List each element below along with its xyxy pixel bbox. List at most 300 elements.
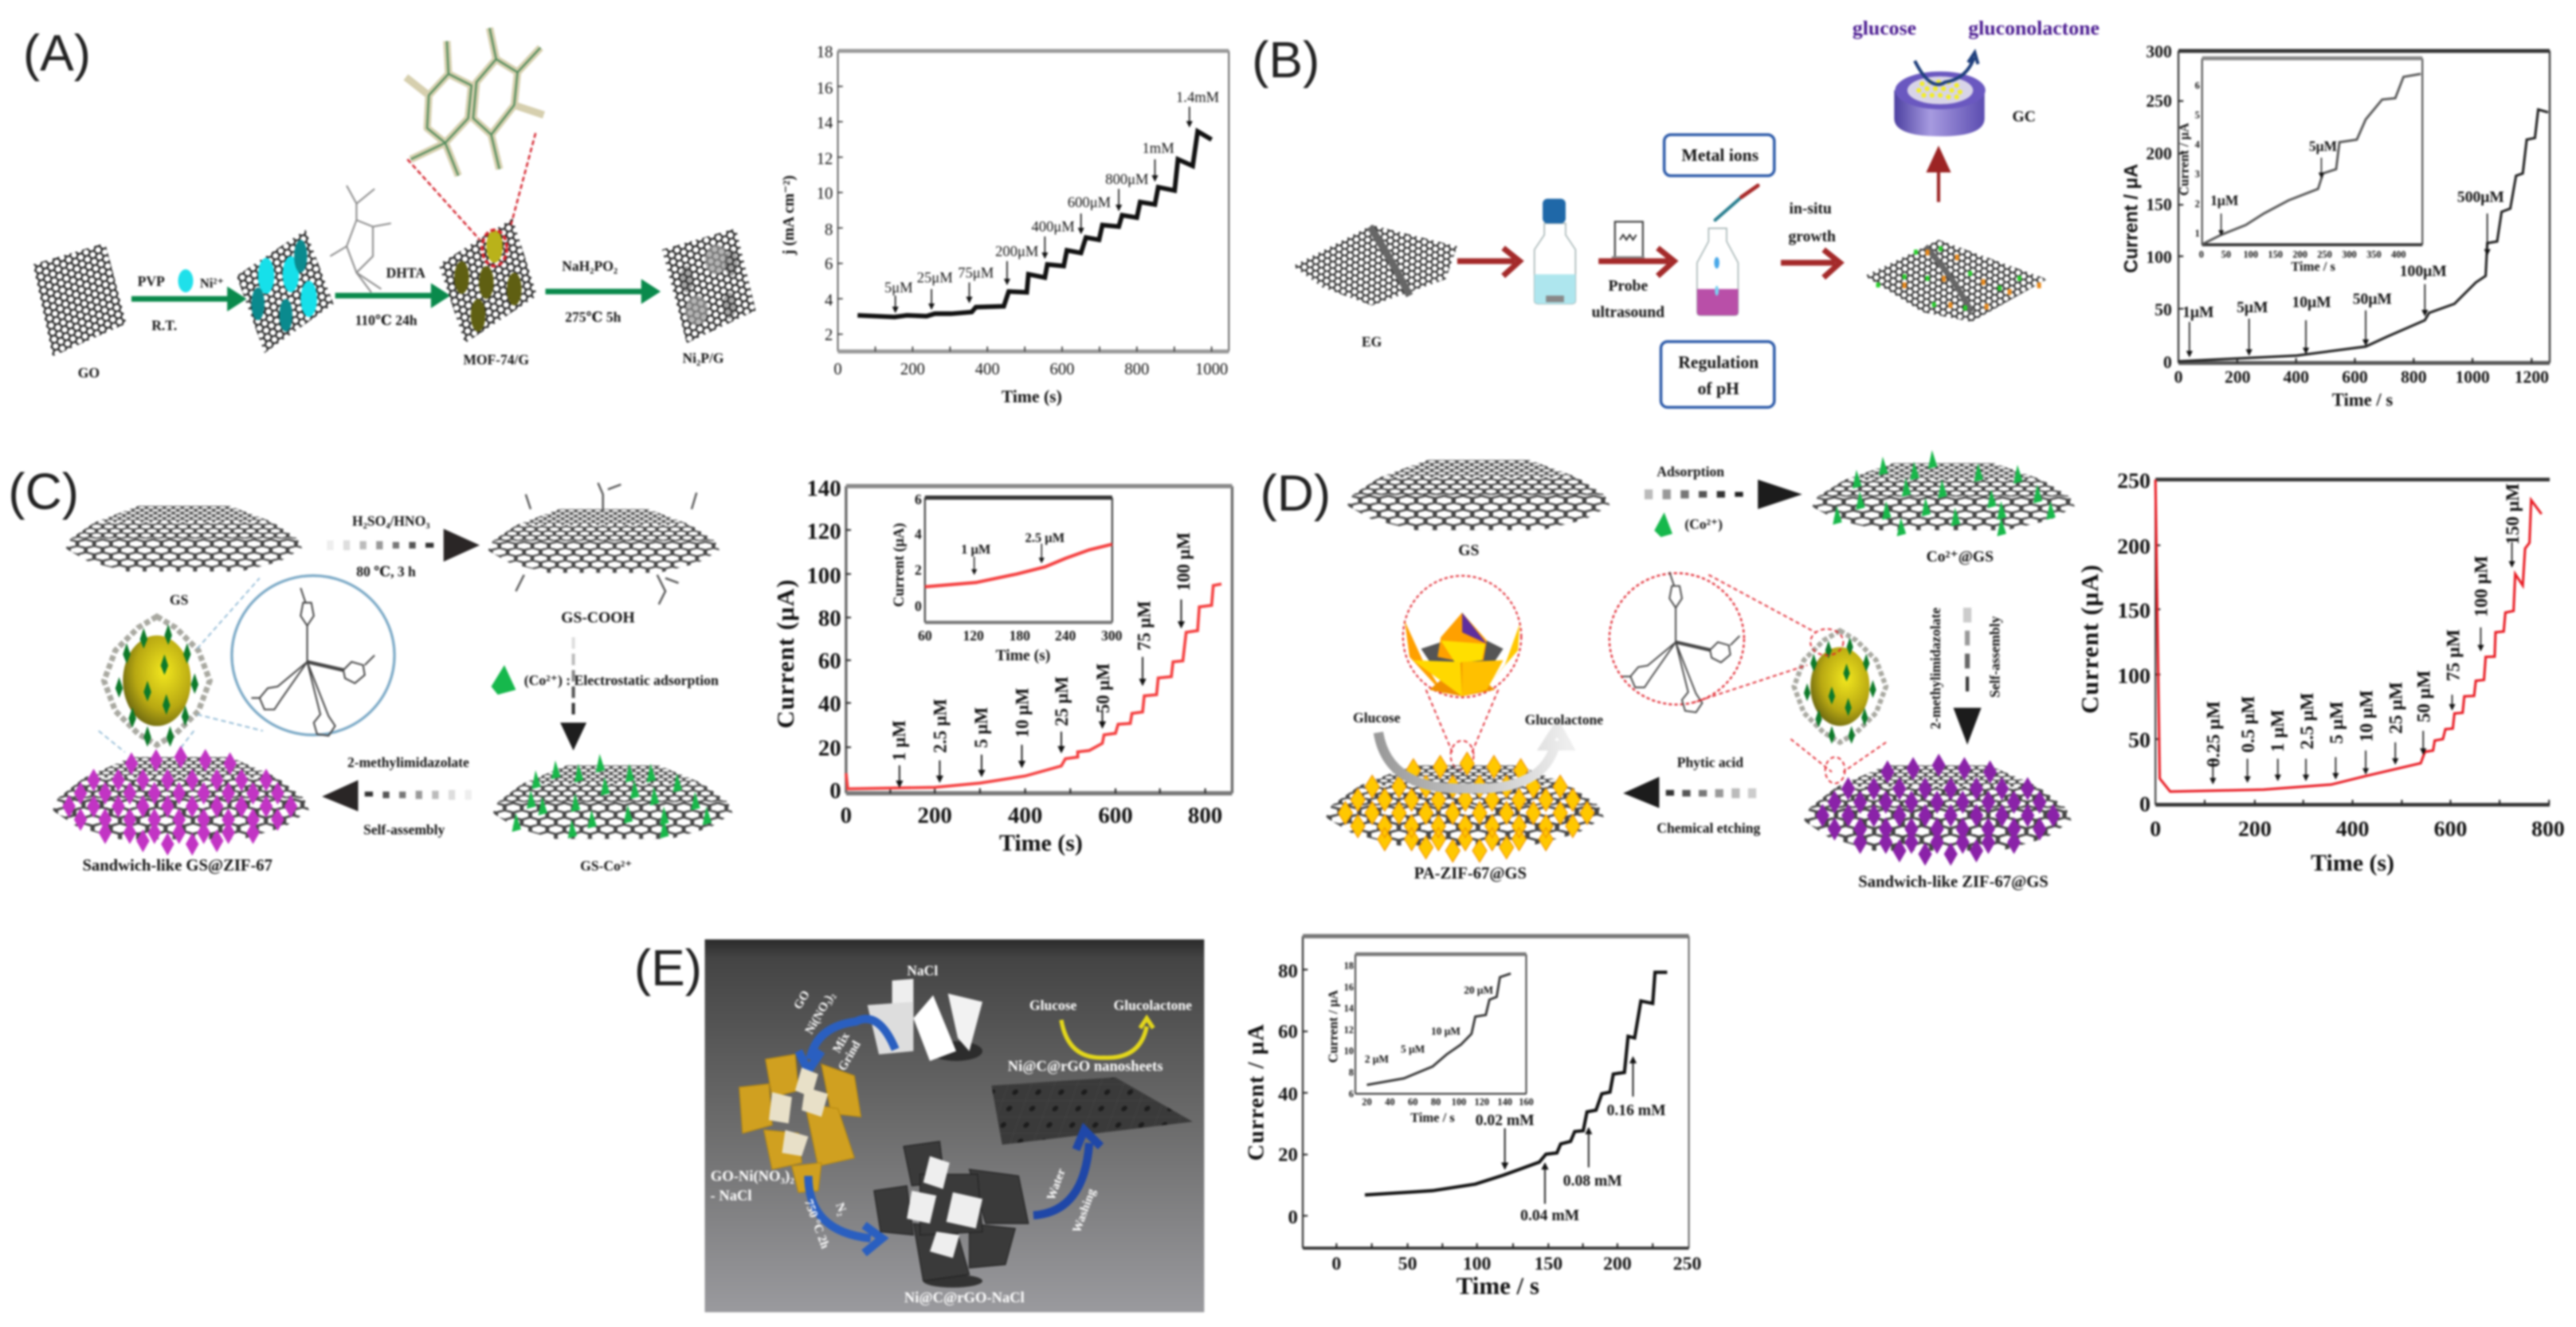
x tick labels: 50 bbox=[1398, 1254, 1417, 1274]
x tick labels: 800 bbox=[1188, 803, 1222, 828]
panel B bbox=[1252, 16, 2550, 409]
NaCl label: NaCl bbox=[907, 963, 938, 979]
red arrow 1 bbox=[1457, 248, 1519, 276]
ZIF-67 particle bbox=[104, 617, 210, 747]
NaH2PO2 label: NaH₂PO₂ bbox=[562, 258, 618, 274]
GS label: GS bbox=[170, 592, 188, 608]
Ni2P/G sheet bbox=[662, 229, 755, 343]
injection arrows bbox=[896, 107, 1190, 312]
GO-Ni label: GO-Ni(NO₃)₂ bbox=[711, 1168, 794, 1184]
inset tick labels: 4 bbox=[915, 526, 922, 542]
inset labels: 5 μM bbox=[1401, 1043, 1425, 1055]
rotated reagent labels bbox=[1927, 608, 2002, 730]
Grind label: Grind bbox=[836, 1039, 864, 1073]
y tick labels: 100 bbox=[2117, 664, 2151, 689]
inset ticks: 20 bbox=[1362, 1097, 1372, 1108]
inset ticks: 18 bbox=[1344, 961, 1354, 972]
axes bbox=[838, 51, 1229, 351]
x tick labels: 100 bbox=[1463, 1254, 1491, 1274]
red zoom lines and circles bbox=[1426, 575, 1886, 784]
rotated concentration labels: 100 μM bbox=[1174, 532, 1194, 591]
label A: (A) bbox=[23, 25, 91, 82]
inset labels bbox=[1365, 984, 1494, 1065]
axes bbox=[1303, 936, 1689, 1248]
glucose labels: Glucose bbox=[1029, 997, 1077, 1013]
glucose label: glucose bbox=[1853, 16, 1916, 39]
y tick labels: 150 bbox=[2117, 598, 2151, 623]
x axis title: Time / s bbox=[1457, 1272, 1539, 1300]
inset ticks: 16 bbox=[1344, 981, 1354, 992]
inset labels: 2.5 μM bbox=[1025, 530, 1065, 545]
x tick labels: 250 bbox=[1673, 1254, 1701, 1274]
adsorption label: Adsorption bbox=[1657, 464, 1724, 480]
injection arrows bbox=[2190, 213, 2488, 356]
PVP Ni label: PVP bbox=[138, 273, 165, 289]
x axis title: Time (s) bbox=[2311, 850, 2394, 876]
rotated concentration labels: 50 μM bbox=[1093, 664, 1113, 713]
Ni2P/G label: Ni₂P/G bbox=[682, 350, 724, 366]
PA-ZIF label: PA-ZIF-67@GS bbox=[1414, 865, 1527, 883]
x tick labels bbox=[2174, 367, 2549, 386]
ultrasound probe device bbox=[1612, 221, 1645, 260]
regulation of pH box: Regulation bbox=[1678, 353, 1759, 372]
panel E bbox=[634, 936, 1701, 1312]
bottle with magenta liquid bbox=[1697, 229, 1738, 315]
GO label: GO bbox=[78, 365, 100, 381]
inset frame bbox=[2202, 58, 2422, 245]
inset x ticks: 100 bbox=[2243, 249, 2258, 260]
x axis title: Time (s) bbox=[999, 830, 1083, 856]
self assembly labels: Self-assembly bbox=[363, 821, 445, 837]
y tick labels: 0 bbox=[829, 778, 841, 804]
x tick labels: 200 bbox=[1603, 1254, 1632, 1274]
y axis title: Current / μA bbox=[1244, 1024, 1269, 1161]
y tick labels: 140 bbox=[806, 476, 841, 502]
inset y ticks: 4 bbox=[2195, 139, 2200, 151]
inset axis titles: Time / s bbox=[2291, 259, 2335, 274]
rotated concentration labels: 75 μM bbox=[2444, 629, 2464, 681]
nanosheets label: Ni@C@rGO nanosheets bbox=[1008, 1058, 1163, 1075]
Co label: (Co²⁺) bbox=[1684, 516, 1723, 532]
concentration labels: 1mM bbox=[1143, 140, 1174, 157]
concentration labels: 100μM bbox=[2400, 263, 2447, 280]
PVP Ni label bbox=[138, 269, 224, 292]
self assembly labels: 2-methylimidazolate bbox=[347, 754, 469, 770]
y tick labels bbox=[2117, 468, 2151, 817]
concentration labels: 0.04 mM bbox=[1520, 1208, 1579, 1224]
inset ticks bbox=[1344, 961, 1534, 1108]
schematic D bbox=[1326, 450, 2075, 891]
MOF pore structure bbox=[406, 28, 543, 176]
EG sheet bbox=[1293, 225, 1457, 306]
inset ticks: 100 bbox=[1452, 1097, 1466, 1108]
concentration labels: 75μM bbox=[958, 264, 994, 281]
bottle with solution bbox=[1535, 198, 1575, 303]
inset x ticks: 400 bbox=[2391, 249, 2406, 260]
chart A: current vs time bbox=[781, 44, 1229, 406]
rotated concentration labels: 5 μM bbox=[2327, 701, 2347, 744]
x axis title: Time / s bbox=[2332, 389, 2393, 409]
rotated concentration labels: 25 μM bbox=[1052, 676, 1072, 726]
inset arrows bbox=[2221, 158, 2321, 235]
blue reaction arrow bbox=[1915, 53, 1978, 84]
GS-Co label: GS-Co²⁺ bbox=[580, 858, 632, 874]
y tick labels bbox=[817, 44, 833, 344]
y tick labels: 0 bbox=[2139, 793, 2151, 817]
concentration labels bbox=[1476, 1102, 1666, 1224]
y tick labels bbox=[1278, 961, 1298, 1228]
red zoom lines bbox=[407, 133, 535, 266]
concentration labels: 0.16 mM bbox=[1607, 1102, 1666, 1119]
panel D bbox=[1260, 450, 2565, 891]
y tick labels bbox=[806, 476, 841, 804]
y tick labels: 18 bbox=[817, 44, 833, 61]
inset x ticks: 300 bbox=[2342, 249, 2357, 260]
inset axis titles: Current / μA bbox=[2176, 123, 2191, 196]
concentration labels: 1.4mM bbox=[1176, 89, 1219, 106]
inset axis titles bbox=[891, 523, 1050, 664]
rotated concentration labels: 2.5 μM bbox=[2297, 692, 2318, 750]
rotated concentration labels: 1 μM bbox=[2268, 710, 2288, 752]
y tick labels: 8 bbox=[825, 221, 833, 239]
condition 110C: 110℃ 24h bbox=[355, 312, 418, 328]
inset chart bbox=[891, 491, 1123, 664]
inset labels: 10 μM bbox=[1431, 1025, 1461, 1037]
y tick labels: 14 bbox=[817, 115, 833, 132]
left arrow bbox=[1623, 777, 1756, 808]
gluconolactone label: gluconolactone bbox=[1968, 16, 2100, 39]
axes bbox=[2155, 480, 2550, 804]
label B: (B) bbox=[1252, 31, 1319, 88]
rotated concentration labels bbox=[2204, 483, 2523, 767]
concentration labels bbox=[884, 89, 1219, 296]
rotated concentration labels bbox=[889, 532, 1194, 761]
inset ticks: 6 bbox=[1349, 1088, 1354, 1099]
concentration labels: 600μM bbox=[1068, 194, 1111, 211]
concentration labels: 200μM bbox=[995, 244, 1038, 260]
left arrow bbox=[322, 780, 472, 812]
inset axis titles: Current (μA) bbox=[891, 523, 908, 607]
rotated concentration labels: 2.5 μM bbox=[931, 699, 951, 753]
inset ticks: 120 bbox=[1475, 1097, 1489, 1108]
panel C bbox=[8, 463, 1232, 875]
x tick labels: 600 bbox=[2434, 816, 2467, 841]
axes bbox=[2178, 51, 2550, 363]
y tick labels bbox=[2146, 42, 2172, 372]
y tick labels: 10 bbox=[817, 185, 833, 202]
y tick labels: 50 bbox=[2155, 300, 2172, 319]
inset ticks: 160 bbox=[1519, 1097, 1534, 1108]
rotated concentration labels: 25 μM bbox=[2386, 682, 2406, 734]
inset x ticks: 150 bbox=[2268, 249, 2283, 260]
x tick labels bbox=[833, 361, 1228, 378]
pipette bbox=[1715, 186, 1758, 220]
panel A bbox=[23, 25, 1229, 406]
concentration labels: 800μM bbox=[1105, 171, 1149, 188]
in-situ growth label: growth bbox=[1788, 229, 1836, 245]
concentration labels: 10μM bbox=[2292, 295, 2331, 311]
blue arrow heat bbox=[808, 1176, 882, 1253]
x tick labels: 200 bbox=[2238, 816, 2272, 841]
inset labels: 20 μM bbox=[1464, 984, 1494, 996]
self assembly labels bbox=[347, 754, 469, 837]
inset ticks: 40 bbox=[1385, 1097, 1395, 1108]
rotated concentration labels: 10 μM bbox=[1013, 688, 1033, 738]
GC electrode bbox=[1894, 72, 1986, 136]
regulation of pH box bbox=[1661, 342, 1774, 407]
Probe ultrasound label: ultrasound bbox=[1592, 304, 1664, 321]
x tick labels: 200 bbox=[900, 361, 925, 378]
NaCl cubes bbox=[868, 979, 982, 1061]
nanosheet mesh bbox=[991, 1078, 1193, 1145]
Water label: Water bbox=[1045, 1167, 1068, 1202]
sandwich GS@ZIF-67 bbox=[53, 746, 309, 855]
decorated sheet bbox=[1864, 240, 2047, 322]
chart B bbox=[2121, 42, 2550, 409]
glucose labels: Glucolactone bbox=[1114, 997, 1192, 1013]
x tick labels: 400 bbox=[2283, 367, 2309, 386]
inset labels: 1 μM bbox=[961, 542, 991, 557]
temperature label: 750 °C 2h bbox=[802, 1197, 832, 1251]
x tick labels: 1000 bbox=[2455, 367, 2490, 386]
etching labels: Phytic acid bbox=[1677, 754, 1743, 770]
inset tick labels: 2 bbox=[915, 562, 922, 578]
concentration labels: 25μM bbox=[917, 270, 953, 287]
x tick labels: 800 bbox=[2531, 816, 2565, 841]
inset axis titles bbox=[1325, 990, 1455, 1125]
GS-Co sheet bbox=[493, 754, 733, 839]
glucose labels bbox=[1029, 997, 1192, 1013]
y tick labels: 100 bbox=[2146, 248, 2172, 267]
GO-Ni label bbox=[711, 1168, 794, 1204]
rotated concentration labels: 5 μM bbox=[971, 707, 991, 748]
injection arrows bbox=[900, 600, 1181, 787]
y tick labels: 100 bbox=[806, 563, 841, 589]
inset axis titles: Current / μA bbox=[1325, 990, 1340, 1063]
glucose glucolactone labels bbox=[1353, 710, 1603, 727]
inset red curve bbox=[925, 544, 1112, 587]
inset x ticks: 350 bbox=[2366, 249, 2382, 260]
y tick labels: 80 bbox=[1278, 961, 1298, 982]
y tick labels: 40 bbox=[818, 691, 841, 717]
molecular zoom circle bbox=[1610, 572, 1744, 712]
x tick labels: 600 bbox=[1050, 361, 1074, 378]
y tick labels: 80 bbox=[818, 606, 841, 632]
y tick labels: 250 bbox=[2146, 92, 2172, 111]
metal ions box bbox=[1664, 135, 1774, 176]
x tick labels: 0 bbox=[833, 361, 842, 378]
inset curve bbox=[1366, 973, 1511, 1085]
molecular zoom circle bbox=[232, 576, 394, 736]
DHTA label: DHTA bbox=[386, 264, 425, 280]
adsorption arrow bbox=[1645, 480, 1802, 509]
inset chart bbox=[1325, 954, 1534, 1125]
y tick labels: 0 bbox=[1288, 1207, 1298, 1228]
acid labels: H₂SO₄/HNO₃ bbox=[352, 513, 429, 529]
concentration labels: 400μM bbox=[1032, 219, 1075, 236]
Washing label: Washing bbox=[1070, 1187, 1099, 1235]
chart D bbox=[2076, 468, 2565, 876]
y tick labels: 16 bbox=[817, 80, 833, 98]
rotated concentration labels: 1 μM bbox=[889, 720, 909, 761]
x tick labels: 0 bbox=[2174, 367, 2182, 386]
schematic B: synthesis route bbox=[1293, 16, 2100, 407]
in-situ growth label bbox=[1788, 201, 1836, 245]
y axis title: Current (μA) bbox=[771, 579, 799, 729]
inset x ticks: 0 bbox=[2199, 249, 2204, 260]
inset y ticks bbox=[2195, 80, 2200, 239]
concentration labels: 1μM bbox=[2182, 304, 2213, 321]
gray cluster bbox=[874, 1141, 1029, 1288]
schematic A: synthesis route bbox=[33, 28, 755, 381]
Probe ultrasound label: Probe bbox=[1608, 278, 1648, 295]
x tick labels: 400 bbox=[2336, 816, 2369, 841]
x tick labels: 0 bbox=[841, 803, 852, 828]
PVP Ni label: Ni²⁺ bbox=[200, 276, 224, 291]
y tick labels: 2 bbox=[825, 327, 833, 344]
N2 label: N₂ bbox=[833, 1201, 850, 1218]
in-situ growth label: in-situ bbox=[1790, 201, 1832, 217]
label E: (E) bbox=[634, 939, 702, 996]
x tick labels: 600 bbox=[1098, 803, 1133, 828]
y tick labels: 250 bbox=[2117, 468, 2151, 493]
red curve bbox=[2155, 480, 2542, 792]
chart E bbox=[1244, 936, 1701, 1300]
inset tick labels: 240 bbox=[1055, 628, 1076, 644]
sandwich label: Sandwich-like ZIF-67@GS bbox=[1858, 873, 2049, 891]
vertical dashed arrow bbox=[1954, 608, 1982, 745]
label D: (D) bbox=[1260, 464, 1331, 522]
red arrow 3 bbox=[1781, 249, 1840, 277]
metal ions box: Metal ions bbox=[1681, 146, 1759, 165]
Co@GS sheet bbox=[1812, 450, 2075, 536]
GO sheet bbox=[33, 243, 127, 356]
x tick labels: 150 bbox=[1535, 1254, 1562, 1274]
x tick labels bbox=[841, 803, 1222, 828]
label C: (C) bbox=[8, 463, 79, 520]
x tick labels bbox=[2150, 816, 2565, 841]
inset x ticks: 250 bbox=[2317, 249, 2332, 260]
x tick labels bbox=[1331, 1254, 1701, 1274]
inset x ticks: 50 bbox=[2221, 249, 2231, 260]
y tick labels: 200 bbox=[2146, 144, 2172, 163]
y tick labels: 0 bbox=[2163, 353, 2172, 372]
PA-ZIF-67@GS bbox=[1326, 752, 1604, 862]
x tick labels: 1000 bbox=[1195, 361, 1228, 378]
x tick labels: 800 bbox=[1124, 361, 1149, 378]
inset tick labels: 300 bbox=[1101, 628, 1123, 644]
x tick labels: 600 bbox=[2342, 367, 2368, 386]
inset tick labels: 180 bbox=[1010, 628, 1030, 644]
y tick labels: 20 bbox=[1278, 1145, 1298, 1166]
sandwich ZIF-67@GS bbox=[1804, 754, 2072, 866]
y tick labels: 150 bbox=[2146, 195, 2172, 214]
x tick labels: 400 bbox=[975, 361, 1000, 378]
GO label: GO bbox=[791, 988, 813, 1012]
x axis title: Time (s) bbox=[1002, 387, 1062, 406]
y axis title: j (mA cm⁻²) bbox=[781, 175, 798, 256]
y tick labels: 4 bbox=[825, 292, 833, 310]
y tick labels: 200 bbox=[2117, 534, 2151, 559]
regulation of pH box: of pH bbox=[1698, 379, 1739, 398]
injection arrows bbox=[1505, 1057, 1633, 1204]
inset tick labels: 120 bbox=[963, 628, 984, 644]
concentration labels: 5μM bbox=[2237, 299, 2268, 316]
inset axis titles: Time / s bbox=[1410, 1110, 1455, 1125]
rotated concentration labels: 50 μM bbox=[2413, 671, 2434, 722]
rotated concentration labels: 10 μM bbox=[2356, 690, 2377, 742]
x tick labels: 1200 bbox=[2515, 367, 2549, 386]
green arrow 1 bbox=[131, 292, 241, 307]
chart C bbox=[771, 476, 1232, 856]
GS sheet bbox=[65, 506, 302, 572]
DHTA molecule bbox=[330, 186, 391, 292]
etching labels: Chemical etching bbox=[1657, 820, 1761, 836]
R.T. label: R.T. bbox=[151, 317, 177, 333]
curve bbox=[2178, 110, 2548, 362]
red curve bbox=[846, 584, 1221, 789]
inset curve bbox=[2202, 74, 2421, 245]
inset tick labels bbox=[915, 491, 1123, 644]
yellow cluster bbox=[739, 1055, 861, 1192]
glucose glucolactone labels: Glucose bbox=[1353, 710, 1401, 726]
PA-ZIF crystal zoom bbox=[1403, 576, 1521, 697]
cluster label: Ni@C@rGO-NaCl bbox=[904, 1290, 1025, 1306]
inset ticks: 14 bbox=[1344, 1003, 1354, 1014]
acid arrow bbox=[327, 529, 480, 562]
inset labels: 5μM bbox=[2309, 139, 2338, 155]
dark background bbox=[705, 939, 1204, 1312]
condition 275C: 275℃ 5h bbox=[565, 309, 621, 325]
concentration labels: 500μM bbox=[2457, 190, 2504, 206]
inset tick labels: 0 bbox=[915, 598, 922, 614]
rotated concentration labels: 0.25 μM bbox=[2204, 701, 2225, 767]
schematic E: dark scene bbox=[705, 939, 1204, 1312]
dashed zoom lines bbox=[99, 578, 263, 752]
Co pyramid legend bbox=[491, 665, 516, 695]
inset ticks: 140 bbox=[1497, 1097, 1512, 1108]
rotated concentration labels: 150 μM bbox=[2503, 483, 2523, 545]
y axis title: Current / μA bbox=[2121, 164, 2142, 273]
inset x ticks bbox=[2199, 249, 2406, 260]
blue arrow mix bbox=[798, 1019, 896, 1071]
y tick labels: 50 bbox=[2128, 728, 2151, 753]
inset labels: 1μM bbox=[2210, 193, 2239, 209]
y tick labels: 60 bbox=[1278, 1021, 1298, 1043]
x tick labels: 200 bbox=[918, 803, 952, 828]
inset labels bbox=[2210, 139, 2338, 209]
x tick labels: 800 bbox=[2401, 367, 2427, 386]
concentration labels: 5μM bbox=[884, 280, 913, 296]
green arrow 3 bbox=[546, 284, 656, 299]
x tick labels: 400 bbox=[1008, 803, 1042, 828]
Co pyramid legend bbox=[1654, 512, 1672, 537]
y tick labels: 300 bbox=[2146, 42, 2172, 61]
inset frame bbox=[925, 498, 1112, 622]
curve bbox=[1365, 973, 1667, 1195]
Co@GS label: Co²⁺@GS bbox=[1927, 549, 1994, 566]
red arrow 2 bbox=[1598, 248, 1674, 276]
GC label: GC bbox=[2013, 109, 2036, 126]
vertical dashed arrow bbox=[560, 637, 586, 750]
y axis title: Current (μA) bbox=[2076, 564, 2104, 714]
ZIF-67 particle bbox=[1794, 631, 1886, 744]
GS-COOH sheet bbox=[488, 483, 719, 605]
y tick labels: 40 bbox=[1278, 1083, 1298, 1105]
GS-COOH label: GS-COOH bbox=[561, 609, 635, 626]
Ni-ion sheet bbox=[237, 230, 334, 353]
inset ticks: 60 bbox=[1408, 1097, 1417, 1108]
